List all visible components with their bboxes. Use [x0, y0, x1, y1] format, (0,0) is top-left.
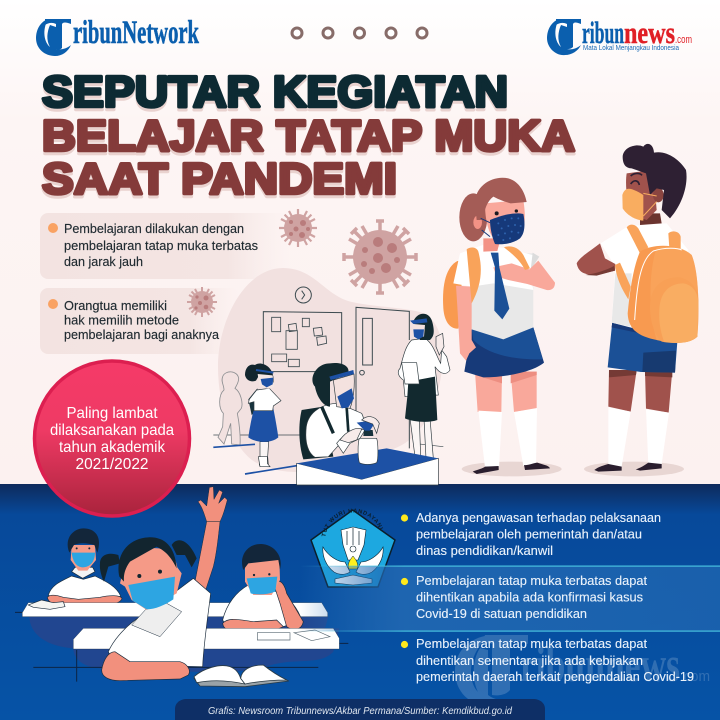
shadow: [462, 462, 562, 476]
student girl with navy mask: [443, 178, 562, 476]
list: conditions: Covid-19 di satuan pendidikan: [416, 606, 587, 621]
highlighted row band: [300, 566, 720, 632]
panel: second note: [40, 288, 240, 354]
list: conditions: Adanya pengawasan terhadap pelaksanaan: [416, 510, 661, 525]
shirt: [471, 253, 533, 339]
raised-hand girl: [100, 487, 227, 681]
backpack pocket: [650, 247, 698, 343]
panel: first note: pembelajaran tatap muka terbatas: [64, 238, 258, 253]
desk shadows: [29, 617, 339, 672]
background: upper light area: [0, 0, 720, 485]
panel: second note: pembelajaran bagi anaknya: [64, 327, 220, 342]
legs: [475, 372, 537, 412]
mask pattern: [497, 217, 522, 241]
watermark: [455, 635, 710, 706]
credit bar: Grafis: Newsroom Tribunnews/Akbar Permana/Sumber: Kemdikbud.go.id: [208, 706, 512, 717]
icon: virus small: [187, 287, 217, 317]
title: SAAT PANDEMI: [42, 158, 397, 206]
blue floor line: [213, 444, 297, 474]
legs: [608, 370, 672, 413]
back desk: [22, 603, 328, 617]
desk with sanitizer: [297, 417, 438, 485]
arms: [456, 286, 476, 361]
list: conditions: Pembelajaran tatap muka terbatas dapat: [416, 636, 647, 651]
hair: [623, 144, 687, 218]
panel: first note: Pembelajaran dilakukan dengan: [64, 221, 244, 236]
socks: [608, 407, 669, 467]
head: [626, 170, 657, 220]
clock: [295, 287, 311, 303]
logo: Tribunnews: Mata Lokal Menjangkau Indonesia: [583, 45, 679, 52]
logo: Tribunnews: news: [624, 15, 675, 50]
eyes: [495, 209, 518, 215]
panel: deadline circle: 2021/2022: [76, 456, 149, 473]
title: [42, 68, 575, 206]
logo: Tribunnews: ribun: [582, 15, 624, 50]
list: conditions: dihentikan apabila ada konfirmasi kasus: [416, 590, 643, 604]
backpack: [443, 261, 463, 329]
panel: first note: [40, 213, 290, 279]
panel: first note: dan jarak jauh: [64, 254, 143, 269]
logo: Tut Wuri Handayani: TUT WURI HANDAYANI: [322, 508, 383, 536]
logo: Tribunnews: [547, 15, 692, 55]
mask: [490, 213, 524, 244]
hair back: [459, 193, 487, 241]
list: conditions: dinas pendidikan/kanwil: [416, 543, 553, 558]
title: BELAJAR TATAP MUKA: [42, 114, 575, 164]
seated student with face shield: [299, 363, 365, 459]
background: lower blue area: [0, 484, 720, 720]
neck: [640, 213, 662, 225]
icon: virus large: [344, 221, 416, 293]
eye: [631, 173, 642, 185]
panel: deadline circle: [34, 361, 190, 516]
title: SEPUTAR KEGIATAN: [42, 70, 508, 120]
backpack straps: [467, 248, 481, 303]
notice board: [263, 312, 342, 372]
illustration background blob: [218, 268, 443, 472]
shadow: [584, 462, 684, 476]
title: BELAJAR TATAP MUKA: [42, 112, 575, 160]
watermark: .com: [680, 668, 710, 685]
floor lines: [15, 612, 348, 682]
backpack body: [628, 246, 698, 343]
ear: [473, 216, 482, 229]
front desk: [73, 628, 339, 649]
list: conditions: dihentikan sementara jika ada kebijakan: [416, 653, 643, 668]
open book: [194, 665, 289, 687]
student in skirt: [245, 363, 281, 467]
logo: Tribunnews: .com: [675, 34, 692, 46]
socks: [478, 408, 537, 467]
panel: deadline circle: Paling lambat: [66, 405, 158, 422]
list: conditions: [401, 510, 694, 684]
mask: [622, 189, 643, 221]
ear: [653, 188, 664, 202]
teacher: [398, 314, 450, 458]
panel: deadline circle: dilaksanakan pada: [50, 422, 174, 439]
list: conditions: pembelajaran oleh pemerintah dan/atau: [416, 526, 642, 542]
student boy with backpack: [577, 144, 698, 476]
door: [213, 307, 443, 448]
back student: [47, 528, 122, 606]
tie: [491, 253, 509, 319]
illustration: classroom: [213, 287, 450, 485]
credit bar: [175, 699, 545, 720]
icon: virus medium: [279, 209, 317, 247]
right student: [223, 544, 303, 633]
shorts: [608, 322, 677, 373]
neck: [483, 238, 501, 252]
mask strap: [643, 193, 657, 216]
logo: Tribun Network: [36, 15, 199, 56]
list: conditions: Pembelajaran tatap muka terbatas dapat: [416, 573, 647, 588]
back book: [28, 600, 65, 609]
shirt: [601, 223, 688, 340]
papers: [257, 630, 330, 641]
shoes: [594, 463, 662, 472]
head: [485, 200, 525, 240]
skirt: [464, 327, 544, 377]
title: SEPUTAR KEGIATAN: [42, 68, 508, 116]
arm: [577, 243, 615, 275]
panel: second note: hak memilih metode: [64, 312, 179, 328]
backpack straps: [615, 225, 681, 299]
panel: second note: Orangtua memiliki: [64, 298, 167, 313]
pagination dots: [292, 28, 427, 38]
logo: Tribun Network: ribunNetwork: [73, 15, 199, 51]
illustration: students in class: [15, 487, 348, 687]
list: conditions: pemerintah daerah terkait pengendalian Covid-19: [416, 669, 694, 684]
mask straps: [481, 218, 490, 237]
logo: Tut Wuri Handayani: [310, 508, 396, 588]
hair top: [475, 178, 527, 220]
title: SAAT PANDEMI: [42, 154, 397, 204]
panel: deadline circle: tahun akademik: [59, 439, 166, 456]
student walking away outline: [218, 372, 242, 445]
shoes: [473, 463, 550, 474]
